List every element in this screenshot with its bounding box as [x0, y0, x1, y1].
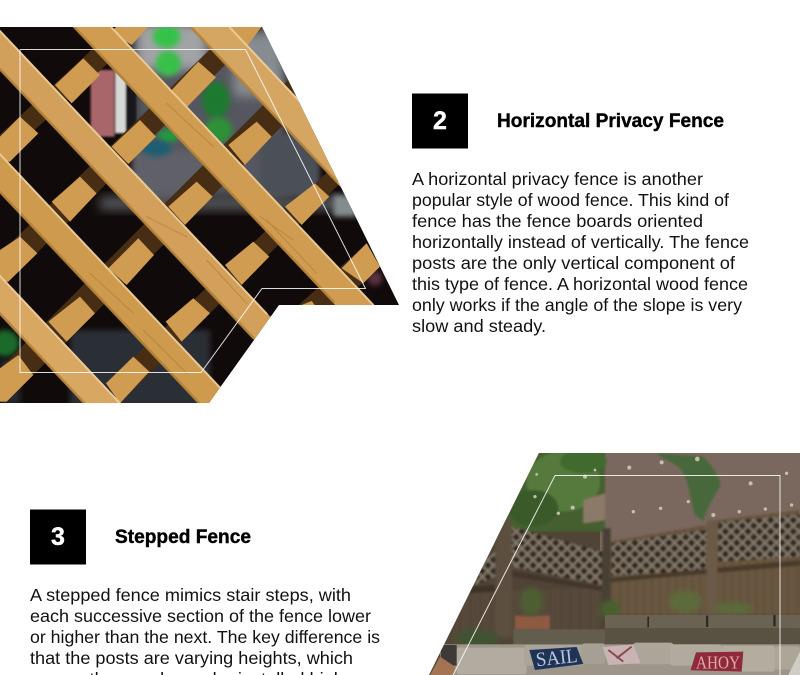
- pillows: AHOY: [696, 652, 740, 672]
- number box 2: 2: [433, 107, 447, 135]
- tree foliage: [497, 450, 720, 532]
- left fence: [440, 520, 602, 648]
- pillows: [529, 644, 800, 675]
- text block: horizontal privacy fence description: horizontally instead of vertically. The fence: [412, 232, 749, 252]
- back slats in shadow: [0, 27, 380, 403]
- text block: horizontal privacy fence description: only works if the angle of the slope is very: [412, 295, 742, 315]
- photo: backyard stepped fence with sofa: [420, 450, 800, 675]
- back slats lit segments: [0, 27, 380, 403]
- number box 3: [30, 510, 86, 564]
- number box 2: [412, 94, 468, 148]
- slat edges and grain: [0, 25, 373, 406]
- brick wall and dark base: [420, 452, 800, 675]
- number box 3: 3: [51, 523, 65, 551]
- photo 2 white outline: [450, 476, 780, 675]
- planter and shrubs: [455, 588, 753, 648]
- text block: stepped fence description: or higher than the next. The key difference is: [30, 627, 380, 647]
- text block: stepped fence description: each successive section of the fence lower: [30, 606, 371, 626]
- retaining wall: [513, 615, 800, 646]
- text block: horizontal privacy fence description: posts are the only vertical component of: [412, 253, 735, 273]
- text block: stepped fence description: that the posts are varying heights, which: [30, 648, 353, 668]
- text block: horizontal privacy fence description: fence has the fence boards oriented: [412, 211, 703, 231]
- text block: horizontal privacy fence description: popular style of wood fence. This kind of: [412, 190, 729, 210]
- heading: Horizontal Privacy Fence: Horizontal Privacy Fence: [497, 110, 724, 132]
- front diagonal slats: [0, 27, 374, 403]
- text block: horizontal privacy fence description: this type of fence. A horizontal wood fence: [412, 274, 748, 294]
- lattice dark background: [0, 20, 403, 410]
- photo 1 white outline: [20, 50, 366, 372]
- heading: Stepped Fence: Stepped Fence: [115, 526, 251, 548]
- sofa: [430, 643, 800, 675]
- text block: horizontal privacy fence description: [412, 169, 749, 336]
- right fence: [603, 510, 800, 625]
- text block: stepped fence description: A stepped fence mimics stair steps, with: [30, 585, 351, 605]
- pillows: SAIL: [535, 645, 579, 671]
- string lights: [533, 457, 793, 517]
- photo: wooden lattice fence: [0, 20, 430, 492]
- text block: horizontal privacy fence description: A horizontal privacy fence is another: [412, 169, 703, 189]
- text block: stepped fence description: [30, 585, 380, 675]
- text block: horizontal privacy fence description: slow and steady.: [412, 316, 546, 336]
